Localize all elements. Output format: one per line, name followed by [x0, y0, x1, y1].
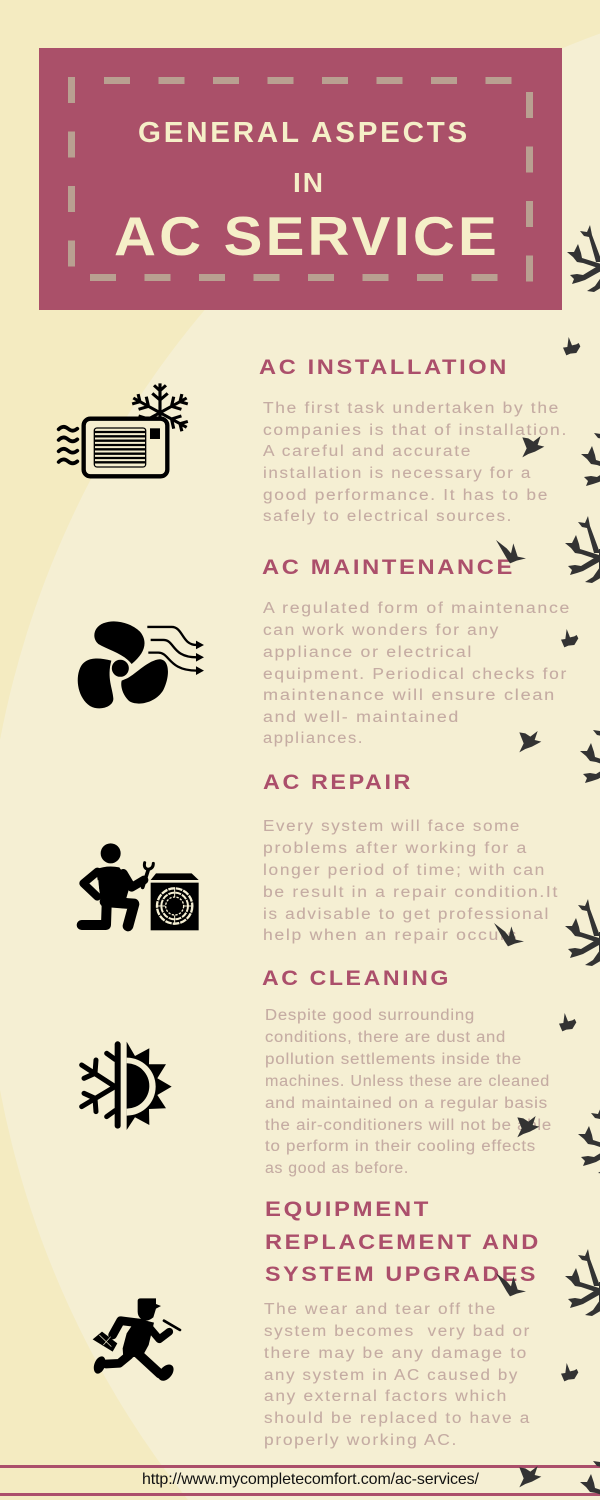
text: AC repair: [263, 818, 559, 944]
text: AC installation: safely to electrical sources.: [263, 508, 513, 525]
text: AC cleaning: pollution settlements inside the: [265, 1051, 522, 1068]
section: equipment replacement and system upgrades: [92, 1197, 541, 1449]
text: AC cleaning: conditions, there are dust and: [265, 1029, 506, 1046]
heading: equipment replacement: REPLACEMENT AND: [265, 1230, 541, 1254]
text: AC cleaning: as good as before.: [265, 1160, 409, 1177]
heading: equipment replacement: [265, 1197, 541, 1286]
text: equipment replacement: there may be any damage to: [264, 1345, 528, 1362]
title: AC SERVICE: [114, 206, 500, 267]
heading: AC repair: AC REPAIR: [263, 770, 413, 794]
section: AC cleaning: [82, 966, 552, 1177]
icon: running repairman with toolbox: [92, 1298, 180, 1384]
text: AC cleaning: Despite good surrounding: [265, 1007, 475, 1024]
heading: AC installation: AC INSTALLATION: [259, 355, 509, 379]
icon: half snowflake half sun: [82, 1041, 172, 1130]
text: AC cleaning: the air-conditioners will not be able: [265, 1117, 552, 1134]
text: equipment replacement: any system in AC caused by: [264, 1367, 519, 1384]
heading: equipment replacement: SYSTEM UPGRADES: [265, 1262, 538, 1286]
text: AC maintenance: appliances.: [263, 730, 364, 747]
text: AC repair: longer period of time; with can: [263, 862, 546, 879]
icon: air conditioner with snowflake: [59, 383, 191, 476]
title: IN: [293, 167, 325, 198]
text: AC repair: help when an repair occurs: [263, 927, 518, 944]
title: [114, 117, 500, 267]
text: AC repair: is advisable to get professional: [263, 906, 550, 923]
text: AC maintenance: equipment. Periodical checks for: [263, 666, 568, 683]
heading: equipment replacement: EQUIPMENT: [265, 1197, 431, 1221]
text: AC installation: companies is that of installation.: [263, 422, 568, 439]
text: AC maintenance: and well- maintained: [263, 709, 460, 726]
text: AC installation: [263, 400, 568, 525]
banner panel: [39, 48, 562, 310]
icon: kneeling technician with outdoor unit: [82, 843, 199, 930]
text: AC maintenance: [263, 600, 571, 747]
text: AC installation: good performance. It has to be: [263, 487, 549, 504]
heading: AC maintenance: AC MAINTENANCE: [262, 555, 515, 579]
text: AC cleaning: [265, 1007, 552, 1177]
text: AC repair: problems after working for a: [263, 840, 528, 857]
text: equipment replacement: properly working AC.: [264, 1432, 458, 1449]
text: AC installation: The first task undertaken by the: [263, 400, 560, 417]
text: AC maintenance: maintenance will ensure clean: [263, 687, 556, 704]
footer link: http://www.mycompletecomfort.com/ac-services/: [142, 1471, 480, 1488]
footer URL band: [0, 1465, 600, 1496]
text: equipment replacement: should be replaced to have a: [264, 1410, 531, 1427]
text: AC repair: be result in a repair condition.It: [263, 884, 559, 901]
text: AC cleaning: and maintained on a regular basis: [265, 1095, 548, 1112]
title: GENERAL ASPECTS: [138, 117, 470, 149]
text: AC installation: A careful and accurate: [263, 443, 472, 460]
section: AC maintenance: [78, 555, 571, 747]
section: AC repair: [82, 770, 559, 944]
text: equipment replacement: any external factors which: [264, 1388, 508, 1405]
text: AC maintenance: can work wonders for any: [263, 622, 500, 639]
text: equipment replacement: [264, 1301, 531, 1449]
text: AC cleaning: machines. Unless these are cleaned: [265, 1073, 550, 1090]
heading: AC cleaning: AC CLEANING: [262, 966, 451, 990]
text: AC installation: installation is necessary for a: [263, 465, 532, 482]
icon: fan with airflow arrows: [78, 621, 204, 708]
text: AC maintenance: A regulated form of maintenance: [263, 600, 571, 617]
text: AC repair: Every system will face some: [263, 818, 521, 835]
text: equipment replacement: system becomes very bad or: [264, 1323, 531, 1340]
text: AC maintenance: appliance or electrical: [263, 644, 473, 661]
section: AC installation: [59, 355, 568, 525]
text: AC cleaning: to perform in their cooling effects: [265, 1138, 536, 1155]
decorative falling snowflakes: [494, 225, 600, 1499]
text: equipment replacement: The wear and tear off the: [264, 1301, 497, 1318]
